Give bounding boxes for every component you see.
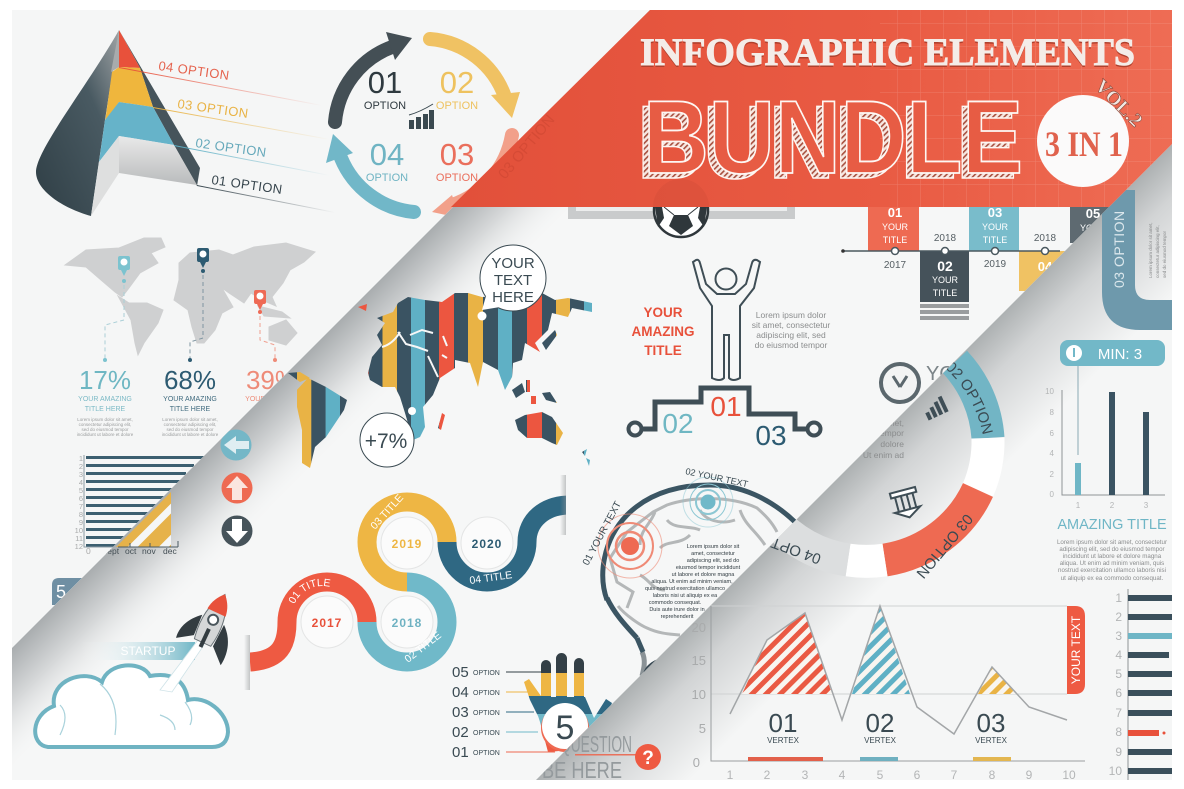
line chart: 5 [699, 721, 706, 736]
line chart: 6 [914, 768, 921, 782]
column chart: 3 [1144, 501, 1149, 510]
step numbers: OPTION [364, 100, 406, 112]
horizontal bar chart [75, 455, 204, 554]
column chart: 8 [1050, 408, 1055, 417]
line chart: VERTEX [767, 736, 800, 745]
tag: your text: YOUR TEXT [1069, 615, 1083, 684]
timeline: 03 [988, 205, 1002, 220]
column chart: 1 [1076, 501, 1081, 510]
tag: your text [1067, 606, 1085, 694]
timeline [841, 205, 1110, 320]
text block [752, 310, 830, 350]
heading: amazing title: AMAZING TITLE [1057, 517, 1167, 533]
brain diagram: adipiscing elit, sed do [687, 558, 739, 564]
horizontal bar chart: 3 [79, 470, 83, 479]
line chart: 20 [692, 620, 706, 635]
timeline: 01 [888, 205, 902, 220]
text fragment: dolore [880, 439, 904, 449]
cloud [35, 665, 228, 747]
year circles: 2019 [392, 537, 422, 551]
banner [451, 10, 1172, 207]
brain diagram: reprehenderit [661, 614, 694, 620]
year circles: 2017 [312, 616, 342, 630]
brain diagram [581, 466, 795, 680]
timeline: TITLE [883, 235, 907, 245]
ring diagram: 04 OPTION [744, 524, 823, 567]
line chart: 02 [866, 708, 894, 738]
vol. 2 label: VOL.2 [1090, 76, 1146, 132]
heading: your amazing title: TITLE [644, 343, 682, 358]
timeline: YOUR [1080, 223, 1106, 233]
text fragment: tempor [878, 428, 904, 438]
ring titles: 01 TITLE [288, 578, 330, 603]
timeline: 02 [937, 258, 953, 274]
hidden block fragment: 5 [56, 582, 66, 602]
target: teal [683, 477, 733, 527]
timeline: YOUR [882, 222, 908, 232]
hand options: 04 [452, 684, 469, 701]
U-shaped block: 03 option: 03 OPTION [1111, 210, 1127, 288]
stat: 17%: sed do eiusmod tempor [81, 427, 129, 432]
pyramid chart [36, 30, 200, 216]
callout: +7%: +7% [365, 430, 407, 453]
timeline: 2017 [884, 260, 907, 271]
hand options: 05 [452, 664, 469, 681]
text block: do eiusmod tempor [755, 340, 828, 350]
slogan badge [533, 16, 626, 95]
question text: QUESTION [560, 731, 632, 757]
horizontal bar chart: 8 [79, 510, 83, 519]
football [568, 207, 795, 238]
line chart: 1 [727, 768, 734, 782]
horizontal bar chart: 12 [75, 542, 83, 551]
step numbers: 01 [368, 65, 402, 100]
stat: 39%: 39% [246, 365, 298, 395]
horizontal bar chart: 0 [86, 546, 91, 556]
option labels [158, 58, 283, 197]
horizontal bar chart: 2 [79, 462, 83, 471]
banner background [451, 10, 1172, 207]
slogan badge: YOUR SLOGAN [533, 16, 589, 82]
timeline: YOUR [982, 222, 1008, 232]
arrow buttons [220, 430, 252, 546]
icon: question mark [635, 744, 661, 770]
text block: Lorem ipsum dolor [756, 310, 826, 320]
stat: 17%: consectetur adipiscing elit, [79, 422, 131, 427]
horizontal bar chart: 4 [79, 478, 83, 487]
timeline: YOUR [932, 275, 958, 285]
callout: your text here: YOUR [491, 255, 535, 272]
bundle lettering: BUNDLE [637, 85, 1017, 201]
hand chart [520, 650, 615, 755]
text block: ut aliquip ex ea commodo consequat. [1061, 575, 1164, 582]
gray world map [65, 238, 315, 355]
brain diagram: commodo consequat. [649, 600, 702, 606]
hidden block fragment [52, 578, 82, 605]
stat: 17%: TITLE HERE [85, 406, 126, 413]
line chart: VERTEX [864, 736, 897, 745]
year circles: 2020 [472, 537, 502, 551]
hand options: 03 [452, 704, 469, 721]
chart overlap: yellow stripes and months: dec [163, 546, 177, 556]
heading: your amazing title [632, 308, 694, 355]
U-shaped block: 03 option: consectetur adipiscing elit, [1155, 225, 1160, 278]
line chart [692, 606, 1085, 782]
column chart: 0 [1050, 490, 1055, 499]
line chart: 2 [764, 768, 771, 782]
icon: clock [879, 362, 950, 404]
side bar chart: 4 [1115, 648, 1122, 662]
banner title: INFOGRAPHIC ELEMENTS [640, 31, 1135, 74]
line chart: 7 [951, 768, 958, 782]
figure on podium [628, 260, 820, 436]
timeline: 2018 [1034, 233, 1057, 244]
callout: your text here [478, 245, 546, 320]
stat: 68%: consectetur adipiscing elit, [164, 422, 216, 427]
ring diagram: 03 OPTION [913, 510, 976, 581]
callout: your text here: TEXT [494, 272, 532, 289]
banner: 03 OPTION [495, 112, 558, 183]
chart overlap: yellow stripes and months: nov [142, 546, 156, 556]
option labels: 01 OPTION [211, 172, 283, 197]
step numbers: OPTION [436, 100, 478, 112]
side bar chart: 2 [1115, 610, 1122, 624]
brain diagram: laboris nisi ut aliquip ex ea [653, 593, 718, 599]
map pins [103, 248, 277, 362]
vertical tile shadows [244, 475, 566, 690]
hand options: OPTION [473, 670, 500, 677]
hand options: 01 [452, 744, 469, 761]
striped world map [288, 293, 592, 468]
stat: 17% [77, 370, 133, 436]
snake timeline [250, 502, 570, 662]
heading: your amazing title: YOUR [643, 305, 683, 320]
text block: nostrud exercitation ullamco laboris nisi [1058, 567, 1166, 574]
question text: BE HERE [542, 757, 622, 783]
line chart: VERTEX [975, 736, 1008, 745]
stat: 17%: YOUR AMAZING [78, 396, 132, 403]
horizontal bar chart: 9 [79, 518, 83, 527]
stat: 68%: YOUR AMAZING [163, 396, 217, 403]
callout: your text here: HERE [492, 289, 534, 306]
hand options: OPTION [473, 710, 500, 717]
bundle lettering: BUNDLE [643, 80, 1023, 196]
brain diagram: aliqua. Ut enim ad minim veniam, [651, 579, 733, 585]
side bar chart: 1 [1115, 591, 1122, 605]
line chart: 01 [769, 708, 797, 738]
side bar chart: 8 [1115, 725, 1122, 739]
timeline: TITLE [983, 235, 1007, 245]
stat: 68% [162, 370, 218, 436]
callout: +7% [360, 407, 416, 467]
hand options: OPTION [473, 690, 500, 697]
line chart: 4 [839, 768, 846, 782]
chart overlap: yellow stripes and months: sept [103, 546, 120, 556]
rocket [160, 594, 228, 692]
step numbers [364, 65, 478, 184]
podium numbers: 03 [755, 420, 787, 451]
icon: bank [890, 487, 922, 521]
side bar chart: 3 [1115, 629, 1122, 643]
horizontal bar chart: 10 [75, 526, 83, 535]
pyramid leader lines [119, 67, 335, 213]
text block [1057, 539, 1167, 582]
option labels: 04 OPTION [158, 58, 230, 83]
stat: 17%: incididunt ut labore et dolore [77, 432, 134, 437]
podium numbers: 01 [710, 391, 742, 422]
column chart [1045, 366, 1165, 510]
podium numbers: 02 [662, 408, 694, 439]
column chart: 6 [1050, 429, 1055, 438]
horizontal bar chart: 7 [79, 502, 83, 511]
brain diagram: ut labore et dolore magna [672, 572, 735, 578]
text block: aliqua. Ut enim ad minim veniam, quis [1060, 560, 1164, 567]
line chart: 10 [692, 687, 706, 702]
text block: adipiscing elit, sed do eiusmod tempor [1059, 546, 1165, 553]
fold shadow [12, 10, 650, 738]
year circles [301, 517, 513, 648]
U-shaped block: 03 option [1102, 190, 1172, 330]
ring titles: 04 TITLE [469, 569, 513, 587]
side bar chart: 6 [1115, 686, 1122, 700]
brain diagram: amet, consectetur [691, 551, 735, 557]
question text [542, 731, 640, 783]
stat: 68%: sed do eiusmod tempor [166, 427, 214, 432]
hand options: OPTION [473, 750, 500, 757]
map seas [382, 330, 447, 377]
teal dot [622, 690, 642, 710]
horizontal bar chart: 5 [79, 486, 83, 495]
hand options: OPTION [473, 730, 500, 737]
text block: sit amet, consectetur [752, 320, 830, 330]
line chart: 15 [692, 653, 706, 668]
line chart: 5 [877, 768, 884, 782]
stat: 17%: Lorem ipsum dolor sit amet, [77, 417, 133, 422]
column chart: 2 [1110, 501, 1115, 510]
column chart: 2 [1050, 470, 1055, 479]
chart overlap: yellow stripes and months [103, 492, 178, 556]
startup banner: STARTUP [121, 644, 175, 658]
brain diagram: eiusmod tempor incididunt [676, 565, 741, 571]
line chart: 0 [693, 755, 700, 770]
side bar chart: 9 [1115, 745, 1122, 759]
horizontal bar chart: 6 [79, 494, 83, 503]
hand options: 02 [452, 724, 469, 741]
horizontal bar chart: 1 [79, 454, 83, 463]
side bar chart [1109, 589, 1172, 780]
timeline: 2019 [984, 259, 1007, 270]
icon: clock: YOU [926, 363, 969, 385]
hand options [452, 664, 555, 761]
stat: 68%: 68% [164, 365, 216, 395]
panel: lower-right infographics [536, 144, 1172, 780]
U-shaped block: 03 option: Lorem ipsum dolor sit amet, [1148, 222, 1153, 278]
stat: 17%: 17% [79, 365, 131, 395]
line chart: 3 [802, 768, 809, 782]
side bar chart: 7 [1115, 706, 1122, 720]
brain diagram: Duis aute irure dolor in [649, 607, 705, 613]
rocket tile [33, 642, 230, 749]
icon: growth bars [409, 104, 434, 129]
text block: Lorem ipsum dolor sit amet, consectetur [1057, 539, 1167, 546]
timeline: 05 [1086, 206, 1100, 221]
circular arrows [326, 32, 520, 218]
ring titles: 03 TITLE [368, 492, 406, 532]
brain diagram: 01 YOUR TEXT [581, 500, 624, 567]
slogan badge: 01 [612, 24, 626, 39]
icon: question mark: ? [642, 748, 654, 769]
U-shaped block: 03 option: sed do eiusmod tempor [1162, 230, 1167, 278]
stat: 68%: incididunt ut labore et dolore [162, 432, 219, 437]
option labels: 03 OPTION [177, 96, 249, 121]
column chart: 4 [1050, 449, 1055, 458]
banner title: INFOGRAPHIC ELEMENTS [640, 33, 1135, 76]
stat: 39% [245, 370, 284, 401]
text fragment: amet, [883, 418, 904, 428]
line chart: 9 [1026, 768, 1033, 782]
badge: 3 in 1 [1037, 95, 1129, 187]
step numbers: 03 [440, 137, 474, 172]
year circles: 2018 [392, 616, 422, 630]
timeline: TITLE [933, 288, 957, 298]
option labels: 02 OPTION [195, 135, 267, 160]
ring titles: 02 TITLE [402, 629, 444, 665]
side bar chart: 10 [1109, 764, 1122, 778]
min badge [1060, 340, 1165, 366]
chart overlap: yellow stripes and months: oct [125, 546, 137, 556]
brain diagram: 02 YOUR TEXT [685, 466, 749, 489]
ring diagram [770, 350, 1004, 579]
line chart: 8 [989, 768, 996, 782]
horizontal bar chart: 11 [75, 534, 83, 543]
startup banner [112, 642, 195, 660]
stat: 68%: Lorem ipsum dolor sit amet, [162, 417, 218, 422]
timeline: 04 [1038, 259, 1053, 274]
step numbers: 04 [370, 137, 404, 172]
text fragment [863, 418, 904, 460]
line chart: 03 [977, 708, 1005, 738]
step numbers: OPTION [436, 172, 478, 184]
min badge: MIN: 3 [1098, 346, 1142, 363]
panel: top-left infographics [36, 30, 520, 605]
text fragment: Ut enim ad [863, 450, 904, 460]
ring diagram: 02 OPTION [947, 362, 993, 434]
badge: 3 in 1: 3 IN 1 [1045, 124, 1123, 164]
text block: adipiscing elit, sed [756, 330, 826, 340]
step numbers: OPTION [366, 172, 408, 184]
ring titles [288, 494, 512, 662]
step numbers: 02 [440, 65, 474, 100]
brain diagram: Lorem ipsum dolor sit [687, 544, 740, 550]
podium numbers [663, 396, 786, 446]
stat: 39%: YOUR AMAZING [245, 396, 299, 403]
target: red [598, 514, 662, 578]
line chart: 10 [1062, 768, 1076, 782]
heading: your amazing title: AMAZING [632, 324, 694, 339]
brain diagram: quis nostrud exercitation ullamco [645, 586, 725, 592]
stat: 68%: TITLE HERE [170, 406, 211, 413]
timeline: 2018 [934, 233, 957, 244]
text block: incididunt ut labore et dolore magna [1063, 553, 1162, 560]
side bar chart: 5 [1115, 667, 1122, 681]
icon: bar chart [921, 396, 949, 421]
hand chart: 5 [556, 709, 574, 747]
column chart: 10 [1045, 387, 1055, 396]
